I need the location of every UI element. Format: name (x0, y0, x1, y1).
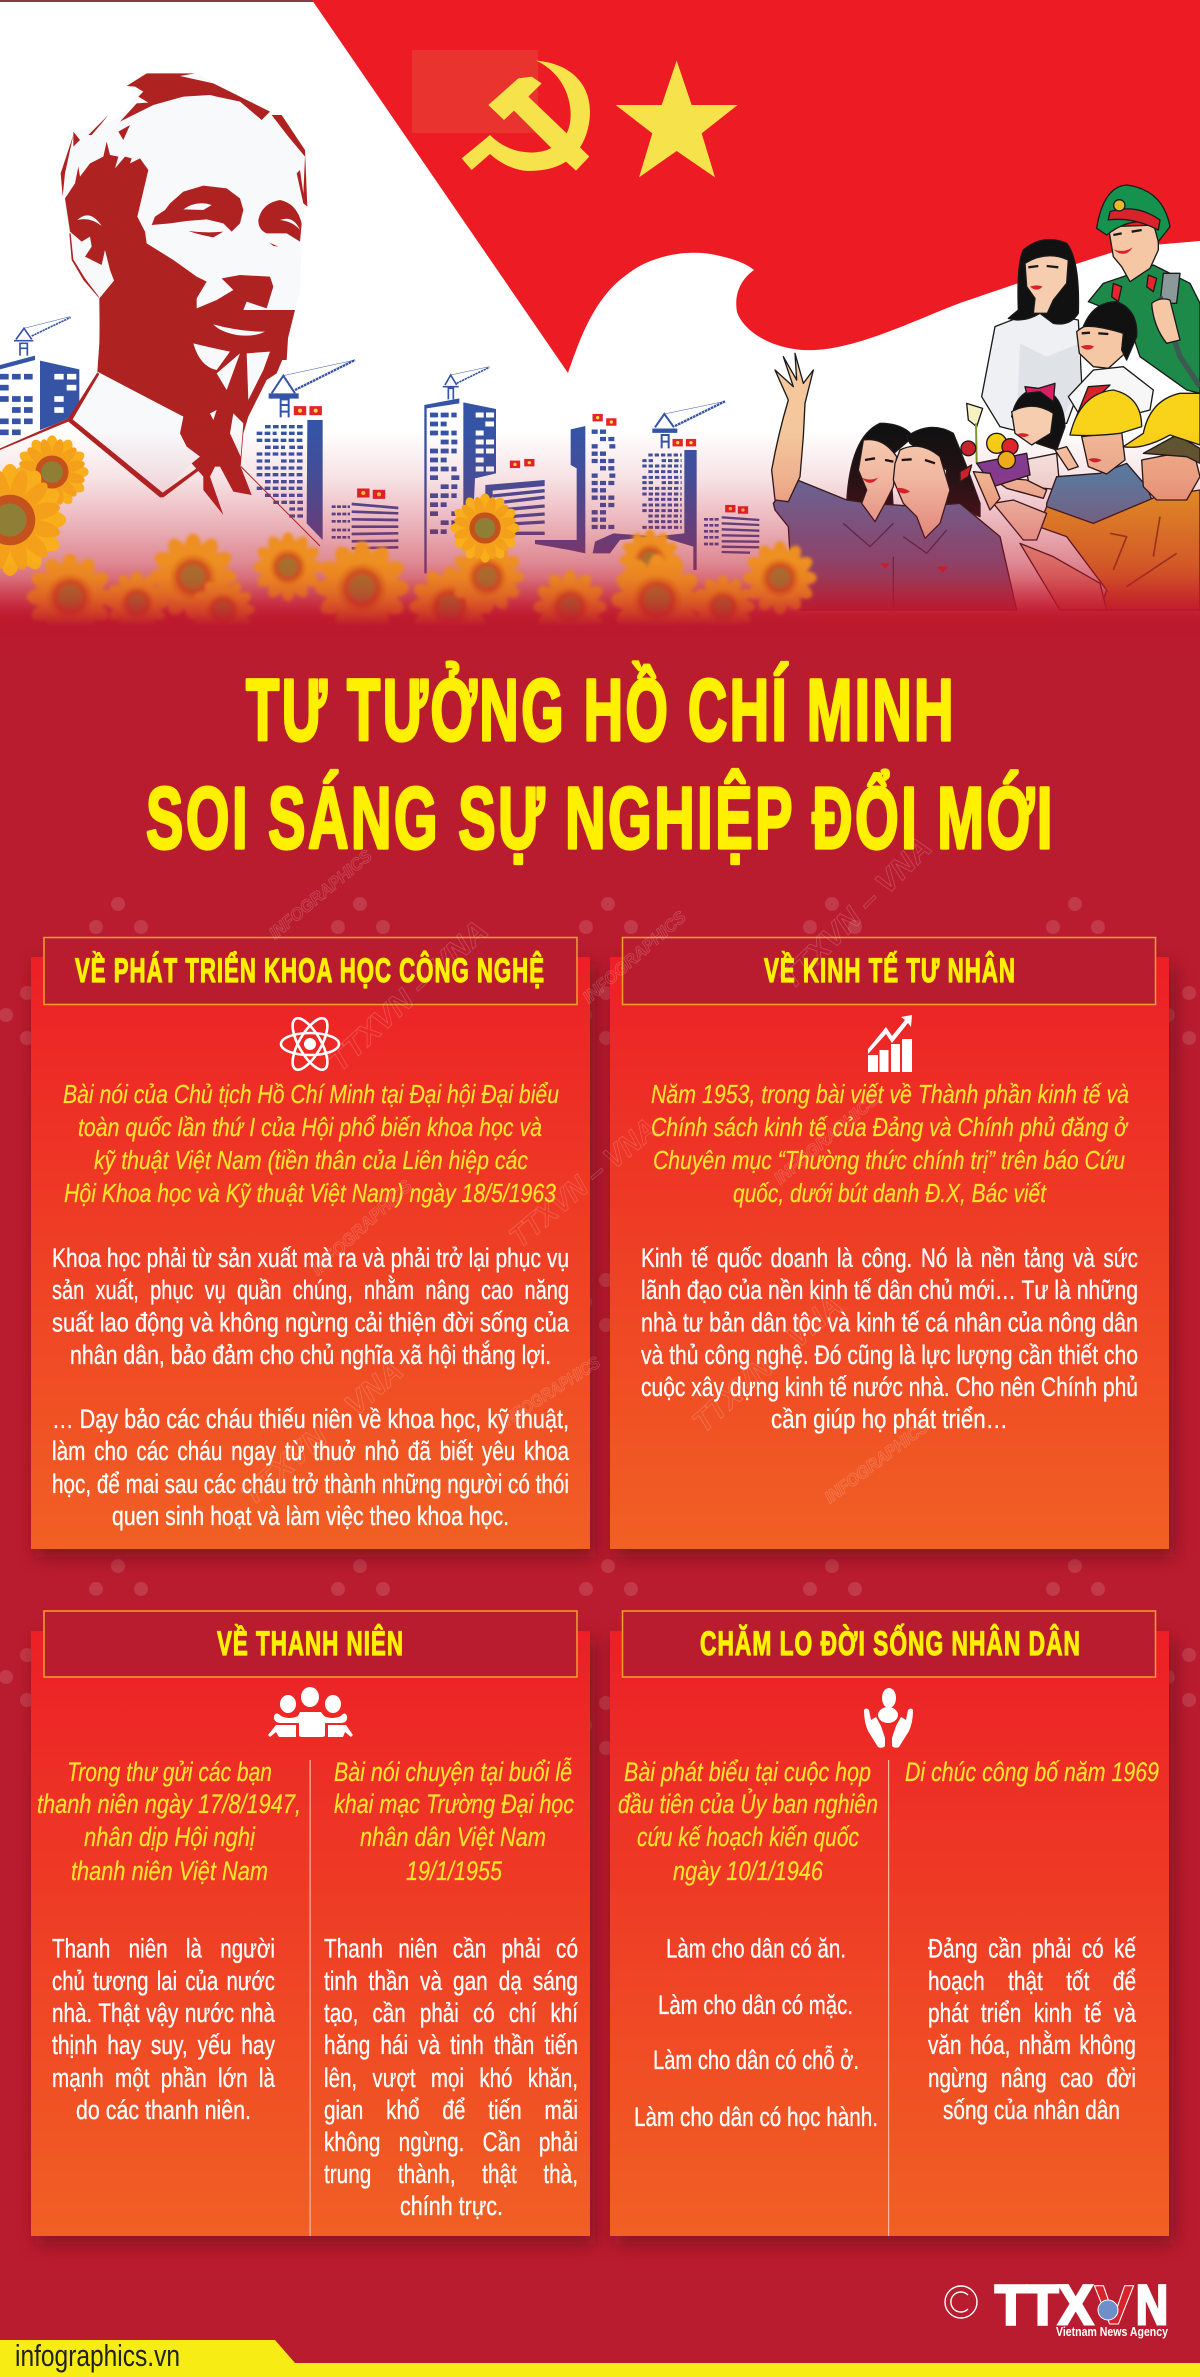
body text: right column: ngừng nâng cao đời (928, 2063, 1136, 2093)
front figures waving (772, 353, 1017, 610)
body text: left column: chủ tương lai của nước (52, 1966, 275, 1996)
body text: left column: Thanh niên là người (52, 1934, 275, 1964)
title (146, 662, 1055, 867)
panel: science and technology (31, 938, 595, 1557)
heading: VỀ THANH NIÊN (217, 1625, 404, 1663)
body text: right column: lên, vượt mọi khó khăn, (324, 2063, 578, 2093)
sunflower fade into panel (0, 562, 1200, 662)
worker with yellow helmet (1047, 390, 1153, 537)
column divider (310, 1760, 311, 2236)
body text: sản xuất, phục vụ quần chúng, nhằm nâng cao năng (52, 1274, 569, 1305)
body text: left column: Làm cho dân có ăn. (666, 1934, 846, 1964)
panel: private economy (610, 938, 1174, 1557)
body text (641, 1243, 1138, 1434)
body text: right column: chính trực. (400, 2191, 503, 2221)
background dot pattern (0, 897, 1196, 1755)
watermarks: TTXVN – VNA (322, 914, 495, 1078)
watermarks: INFOGRAPHICS (497, 1352, 604, 1431)
source note: right column: 19/1/1955 (406, 1856, 503, 1886)
hero illustration (0, 0, 1200, 662)
source note: quốc, dưới bút danh Đ.X, Bác viết (733, 1178, 1047, 1208)
watermarks (235, 831, 938, 1512)
boy with red scarf (1068, 302, 1153, 427)
body text: right column: gian khổ để tiến mãi (324, 2095, 578, 2125)
watermarks: INFOGRAPHICS (265, 846, 376, 943)
portrait of Ho Chi Minh (0, 73, 320, 546)
source note: right column: Bài nói chuyện tại buổi lễ (334, 1756, 572, 1787)
column divider (888, 1760, 889, 2236)
body text: nhân dân, bảo đảm cho chủ nghĩa xã hội thắng lợi. (70, 1339, 551, 1370)
body text: left column: Làm cho dân có học hành. (634, 2102, 878, 2132)
card body (610, 957, 1169, 1549)
card body (31, 957, 590, 1549)
source note: left column: nhân dịp Hội nghị (84, 1822, 256, 1852)
body text: … Dạy bảo các cháu thiếu niên về khoa học, kỹ thuật, (52, 1404, 569, 1434)
body text: right column: sống của nhân dân (943, 2095, 1120, 2125)
watermarks: TTXVN – VNA (687, 1289, 848, 1439)
footer band (0, 2340, 1200, 2377)
source note: right column: nhân dân Việt Nam (360, 1822, 546, 1852)
body text: left column: mạnh một phần lớn là (52, 2063, 276, 2093)
worker in orange jacket (973, 393, 1200, 610)
watermarks: TTXVN – VNA (235, 1354, 410, 1512)
panel: youth (31, 1611, 595, 2244)
source note: left column (37, 1757, 301, 1886)
soldier (1088, 185, 1200, 393)
portrait: collar and beard (0, 310, 320, 546)
heading box (622, 938, 1156, 1004)
heading: VỀ PHÁT TRIỂN KHOA HỌC CÔNG NGHỆ (75, 951, 545, 990)
body text: right column (928, 1934, 1137, 2125)
source note: left column: thanh niên Việt Nam (71, 1856, 268, 1886)
card shadow (36, 1640, 595, 2244)
hero fade overlay (0, 430, 1200, 625)
body text: left column (634, 1934, 878, 2132)
body text: right column: không ngừng. Cần phải (324, 2127, 578, 2157)
body text: right column: hoạch thật tốt để (928, 1966, 1136, 1996)
buildings center (424, 367, 759, 573)
flag light patch (412, 50, 538, 133)
card body (31, 1631, 590, 2236)
body text: right column: Thanh niên cần phải có (324, 1934, 578, 1964)
card shadow (36, 965, 595, 1557)
body text: left column: Làm cho dân có chỗ ở. (653, 2044, 859, 2075)
watermarks: INFOGRAPHICS (308, 1176, 416, 1279)
source note: Bài nói của Chủ tịch Hồ Chí Minh tại Đại hội Đại biểu (63, 1079, 559, 1109)
soft sunflowers in the foreground (27, 529, 817, 648)
body text: right column: văn hóa, nhằm không (928, 2029, 1136, 2060)
watermarks: INFOGRAPHICS (770, 1090, 883, 1188)
group of people (772, 185, 1200, 610)
source note (651, 1079, 1129, 1208)
body text: left column (52, 1934, 276, 2125)
body text: left column: Làm cho dân có mặc. (658, 1990, 853, 2020)
body text: left column: nhà. Thật vậy nước nhà (52, 1998, 276, 2028)
girl with pink bow (990, 383, 1078, 498)
globe (1098, 2300, 1118, 2320)
watermarks: INFOGRAPHICS (579, 907, 690, 1007)
icon: yellow star (616, 61, 738, 177)
source note: left column: thanh niên ngày 17/8/1947, (37, 1789, 301, 1819)
icon: rising bar chart (868, 1015, 912, 1072)
source note: left column: đầu tiên của Ủy ban nghiên (618, 1786, 878, 1819)
source note: left column (618, 1757, 878, 1886)
icon: hands holding a person (864, 1688, 913, 1748)
icon: three people embracing (268, 1687, 353, 1737)
body text: right column: tinh thần và gan dạ sáng (324, 1966, 578, 1996)
agency tagline: Vietnam News Agency (1056, 2325, 1168, 2339)
body text: cần giúp họ phát triển… (771, 1404, 1008, 1434)
logo: TTXVN (945, 2273, 1168, 2339)
buildings left of portrait (0, 317, 79, 432)
source note: left column: cứu kế hoạch kiến quốc (637, 1822, 859, 1852)
source note: right column: khai mạc Trường Đại học (334, 1789, 574, 1819)
agency letters: TTX (995, 2273, 1093, 2336)
card shadow (615, 965, 1174, 1557)
body text: right column: tạo, cần phải có chí khí (324, 1998, 578, 2028)
body text: Khoa học phải từ sản xuất mà ra và phải trở lại phục vụ (52, 1243, 569, 1273)
body text: suất lao động và không ngừng cải thiện đời sống của (52, 1308, 570, 1338)
source note: Hội Khoa học và Kỹ thuật Việt Nam) ngày 18/5/1963 (64, 1178, 556, 1208)
card body (610, 1631, 1169, 2236)
watermarks: TTXVN – VNA (503, 1112, 664, 1254)
copyright symbol (945, 2286, 977, 2318)
source note: left column: Bài phát biểu tại cuộc họp (624, 1757, 871, 1787)
source note: left column: Trong thư gửi các bạn (67, 1757, 272, 1787)
agency letters: V (1094, 2273, 1134, 2336)
watermarks: INFOGRAPHICS (821, 1416, 933, 1507)
agency letters: N (1136, 2273, 1168, 2336)
body text: quen sinh hoạt và làm việc theo khoa học. (112, 1501, 509, 1531)
portrait: head and hair (61, 73, 307, 360)
body text: right column (324, 1934, 578, 2221)
source note: toàn quốc lần thứ I của Hội phổ biến khoa học và (78, 1112, 542, 1142)
icon: atom (281, 1013, 339, 1075)
body text: right column: hăng hái và tinh thần tiến (324, 2030, 578, 2060)
footer url: infographics.vn (15, 2338, 180, 2373)
red flag (312, 0, 1200, 373)
watermarks: TTXVN – VNA (774, 831, 938, 996)
buildings right of portrait (257, 360, 398, 548)
hero white background (0, 0, 1200, 625)
source note: kỹ thuật Việt Nam (tiền thân của Liên hiệp các (94, 1145, 528, 1175)
body text: làm cho các cháu ngay từ thuở nhỏ đã biết yêu khoa (52, 1436, 570, 1466)
top edge line (0, 0, 1200, 2)
heading box (44, 938, 577, 1004)
heading box (622, 1611, 1156, 1677)
source note: right column (334, 1756, 574, 1886)
heading box (44, 1611, 577, 1677)
body text: left column: thịnh hay suy, yếu hay (52, 2030, 275, 2060)
source note: left column: ngày 10/1/1946 (673, 1856, 824, 1886)
woman in white ao dai (982, 240, 1082, 430)
body text: right column: phát triển kinh tế và (928, 1998, 1137, 2028)
panel: caring for people's lives (610, 1611, 1174, 2244)
heading: VỀ KINH TẾ TƯ NHÂN (764, 952, 1016, 990)
agency letters (995, 2273, 1168, 2336)
body text: right column: Đảng cần phải có kế (928, 1934, 1136, 1964)
bright sunflowers (0, 435, 520, 576)
icon: hammer and sickle (462, 61, 590, 171)
body text: học, để mai sau các cháu trở thành những người có thói (52, 1469, 569, 1499)
source note (63, 1079, 559, 1208)
card shadow (615, 1640, 1174, 2244)
sunflowers (0, 435, 817, 648)
body text (52, 1243, 570, 1531)
body text: left column: do các thanh niên. (76, 2095, 251, 2125)
body text: right column: trung thành, thật thà, (324, 2159, 578, 2189)
bouquet of flowers (961, 403, 1030, 487)
